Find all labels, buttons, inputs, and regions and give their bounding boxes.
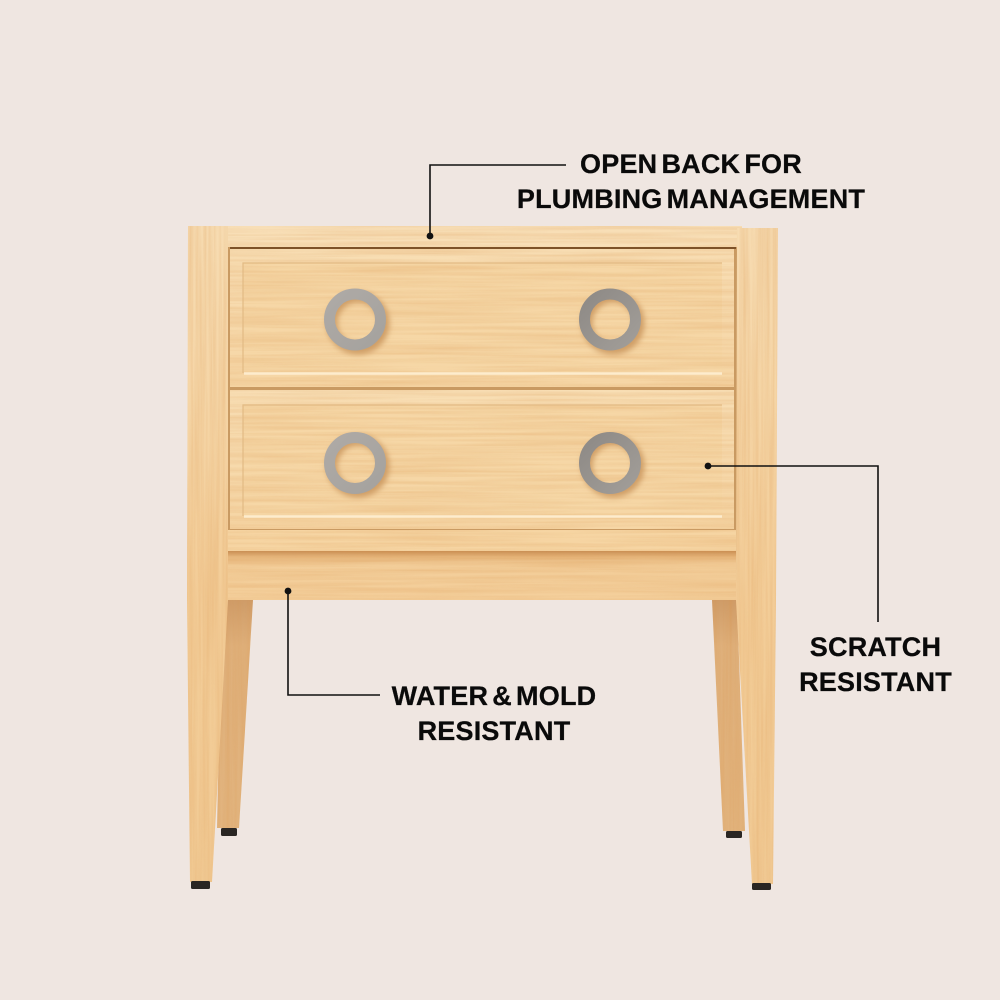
handle: upper right: [584, 294, 639, 349]
callout: open back: PLUMBING MANAGEMENT: [517, 184, 865, 214]
callout: water and mold resistant: WATER & MOLD: [392, 681, 596, 711]
handle: lower left: [330, 438, 384, 492]
handle: lower right: [584, 438, 639, 492]
back legs: [217, 600, 745, 838]
nightstand product: [187, 226, 778, 890]
callout: open back: [427, 149, 865, 239]
callout: scratch resistant: [705, 463, 952, 697]
front legs: [187, 226, 778, 890]
callout: scratch resistant: RESISTANT: [799, 667, 952, 697]
upper drawer: [230, 249, 734, 387]
callout: open back: OPEN BACK FOR: [580, 149, 802, 179]
drawer gap shadow: [230, 247, 736, 249]
callout: scratch resistant: SCRATCH: [810, 632, 941, 662]
handle: upper left: [330, 294, 384, 349]
top rail: [228, 226, 742, 247]
callout: water and mold resistant: [285, 588, 596, 746]
callout: water and mold resistant: RESISTANT: [418, 716, 571, 746]
lower rail: [228, 530, 736, 551]
lower drawer: [230, 390, 734, 529]
cabinet body: [228, 227, 738, 600]
bottom apron: [228, 551, 736, 600]
